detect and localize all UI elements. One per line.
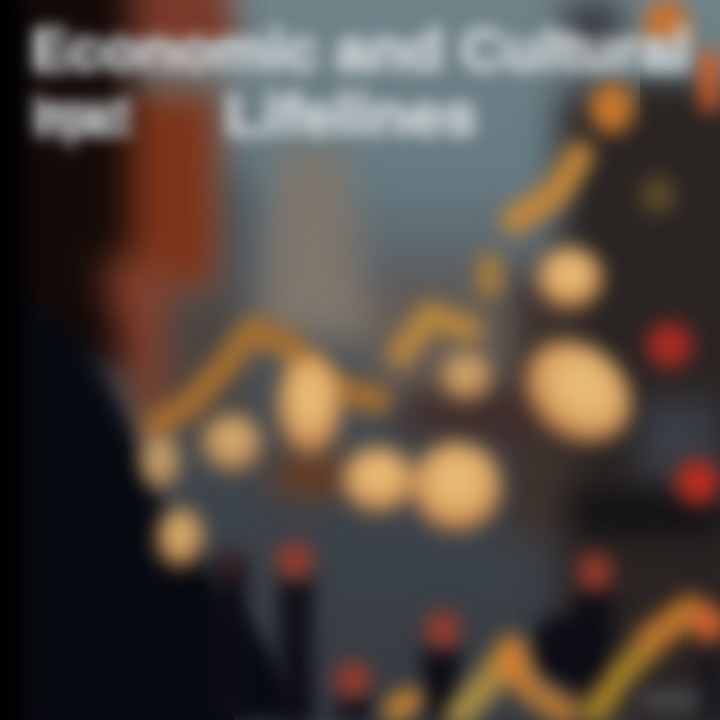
person: hair and neck [0, 0, 225, 430]
chart markers: orange lights [590, 0, 720, 214]
chart line: orange trend [155, 155, 580, 425]
red markers [647, 322, 720, 504]
background: building underlay at right edge [640, 90, 720, 720]
left edge shadow [0, 0, 40, 720]
person: dark shoulder [0, 0, 310, 720]
dark band under coins [270, 385, 720, 530]
person: hair underlay [0, 30, 90, 330]
coins: glowing cluster [140, 247, 652, 568]
bottom right grey block [640, 650, 720, 720]
title text: Economic and Cultural [28, 18, 690, 83]
chart line: bottom right trend [395, 603, 720, 715]
person: shoulder underlay [0, 330, 235, 720]
title text: Lifelines [225, 83, 477, 148]
candlestick bars [215, 542, 613, 720]
title text [28, 18, 690, 148]
person: hair top strip [0, 0, 225, 40]
background: distant tower [135, 150, 505, 430]
background: dark right buildings [505, 0, 720, 720]
title text: Impact [30, 83, 130, 148]
